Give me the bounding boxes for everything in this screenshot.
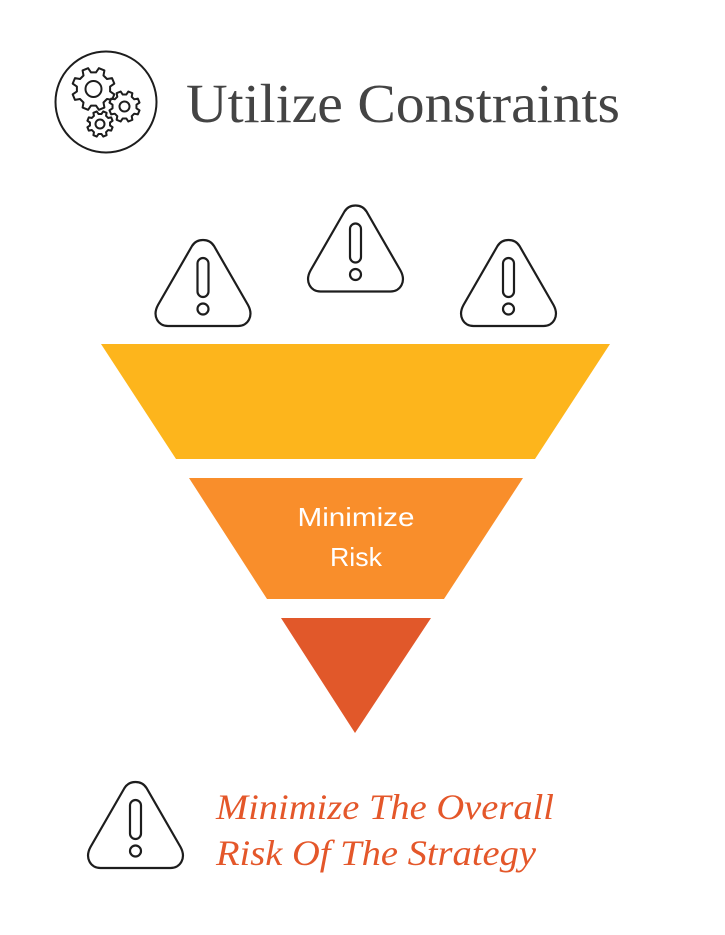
- icon: gears in circle: [56, 52, 156, 152]
- funnel bottom tier: [281, 618, 431, 733]
- callout text: [215, 787, 554, 873]
- icon: warning triangle center: [308, 206, 403, 292]
- title: Utilize Constraints: [186, 73, 620, 134]
- icon: warning triangle bottom: [88, 782, 183, 868]
- funnel top tier: [101, 344, 610, 459]
- label: Minimize Risk: Risk: [330, 542, 383, 572]
- icon: warning triangle left: [156, 240, 250, 326]
- callout text: Risk Of The Strategy: [215, 833, 536, 873]
- label: Minimize Risk: Minimize: [298, 502, 414, 532]
- funnel middle tier: [189, 478, 523, 599]
- callout text: Minimize The Overall: [215, 787, 554, 827]
- label: Minimize Risk: [298, 502, 414, 572]
- icon: warning triangle right: [461, 240, 556, 326]
